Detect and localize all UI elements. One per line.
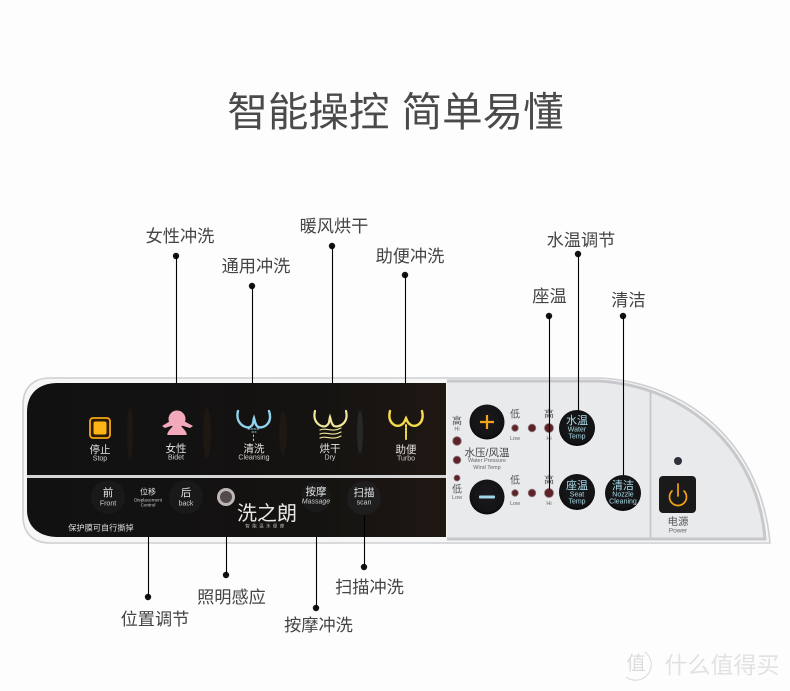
label: water temp low/high bbox=[510, 408, 554, 442]
label: massage: 按摩 bbox=[306, 485, 327, 498]
label: turbo bbox=[396, 443, 417, 462]
label: cleansing: 清洗 bbox=[244, 442, 265, 455]
label: seat temp low/high: Hi bbox=[546, 501, 552, 507]
callout: cleaning: 清洁 bbox=[611, 290, 646, 310]
label: cleansing bbox=[238, 442, 270, 462]
label: water pressure and wind temp: Wind Temp bbox=[473, 465, 501, 471]
label: power: Power bbox=[669, 528, 688, 534]
icon: cleansing bbox=[237, 411, 270, 441]
callout: position bbox=[121, 537, 189, 629]
callout: seat temp: 座温 bbox=[532, 286, 567, 306]
label: front bbox=[100, 486, 116, 508]
control panel bbox=[23, 378, 770, 543]
button: power bbox=[659, 476, 696, 513]
divider: power section bbox=[650, 392, 652, 538]
label: dry: Dry bbox=[325, 454, 336, 462]
panel: dark adjustment strip bbox=[27, 478, 446, 537]
label: pressure high: Hi bbox=[454, 426, 460, 432]
button: minus bbox=[470, 480, 504, 514]
label: displacement bbox=[134, 486, 163, 508]
label: seat temp low/high: Low bbox=[510, 501, 520, 507]
button: water temp: Temp bbox=[568, 434, 586, 440]
label: bidet bbox=[166, 442, 186, 462]
indicator lights: water temp bbox=[512, 424, 554, 432]
panel: light control area bbox=[447, 380, 765, 538]
label: massage bbox=[302, 485, 330, 506]
divider between dark sections bbox=[27, 475, 446, 478]
label: scan: scan bbox=[357, 500, 371, 506]
label: water pressure and wind temp bbox=[465, 447, 510, 471]
label: pressure high: 高 bbox=[452, 414, 462, 428]
label: film note: 保护膜可自行撕掉 bbox=[68, 522, 134, 532]
label: front: Front bbox=[100, 500, 116, 508]
button: water temp: 水温 bbox=[566, 414, 588, 427]
callout: scan bbox=[335, 515, 404, 597]
label: seat temp low/high: 低 bbox=[510, 474, 520, 486]
label: water temp low/high: 低 bbox=[510, 408, 520, 420]
label: power: 电源 bbox=[668, 515, 689, 528]
callout: seat temp bbox=[532, 286, 567, 489]
callout: position: 位置调节 bbox=[121, 609, 189, 629]
label: displacement: 位移 bbox=[140, 486, 156, 496]
panel: outer shell bbox=[23, 378, 770, 543]
label: dry: 烘干 bbox=[320, 443, 340, 455]
label: pressure low: 低 bbox=[452, 482, 462, 496]
indicator lights: pressure bbox=[453, 437, 461, 481]
callout: water temp: 水温调节 bbox=[547, 230, 615, 250]
indicator lights: seat temp bbox=[512, 488, 554, 498]
label: power bbox=[668, 515, 689, 534]
icon: turbo bbox=[389, 411, 423, 439]
label: pressure low: Low bbox=[452, 495, 462, 501]
brand logo: 智能温水便座 bbox=[245, 522, 287, 530]
callout: bidet bbox=[146, 226, 214, 383]
icon: dry bbox=[314, 411, 347, 438]
label: stop bbox=[90, 443, 110, 462]
label: seat temp low/high: 高 bbox=[544, 474, 554, 486]
button: seat temp: Seat bbox=[570, 492, 584, 498]
callout: cleaning bbox=[611, 290, 646, 475]
button: nozzle cleaning: Cleaning bbox=[609, 498, 637, 506]
label: water temp low/high: Hi bbox=[546, 436, 552, 442]
label: stop: Stop bbox=[93, 456, 107, 462]
label: cleansing: Cleansing bbox=[238, 454, 270, 462]
callout: warm air dry: 暖风烘干 bbox=[300, 216, 368, 236]
button: water temp: Water bbox=[568, 426, 587, 434]
watermark: 值 bbox=[626, 652, 646, 674]
callout: massage: 按摩冲洗 bbox=[284, 615, 353, 635]
icon: stop bbox=[90, 418, 110, 438]
callout: scan: 扫描冲洗 bbox=[335, 577, 404, 597]
button: seat temp: Temp bbox=[568, 498, 586, 506]
label: water pressure and wind temp: 水压/风温 bbox=[465, 447, 510, 459]
label: massage: Massage bbox=[302, 498, 330, 506]
label: pressure high bbox=[452, 414, 462, 432]
icon: light sensor bbox=[217, 488, 235, 506]
button: nozzle cleaning: Nozzle bbox=[612, 492, 634, 498]
label: displacement: Control bbox=[141, 502, 155, 508]
panel: dark function buttons bbox=[27, 383, 446, 475]
callout: warm air dry bbox=[300, 216, 368, 383]
button: seat temp: 座温 bbox=[566, 478, 588, 492]
callout: cleansing bbox=[222, 256, 290, 383]
label: water temp low/high: 高 bbox=[544, 408, 554, 420]
brand logo: 洗之朗 bbox=[237, 502, 297, 525]
callout: water temp bbox=[547, 230, 615, 411]
label: bidet: 女性 bbox=[166, 442, 186, 455]
callout: turbo: 助便冲洗 bbox=[376, 246, 444, 266]
callout: light sensor bbox=[197, 537, 266, 607]
label: displacement: Displacement bbox=[134, 498, 163, 502]
label: front: 前 bbox=[103, 486, 113, 499]
callout: cleansing: 通用冲洗 bbox=[222, 256, 290, 276]
label: seat temp low/high bbox=[510, 474, 554, 507]
label: scan: 扫描 bbox=[354, 486, 374, 499]
button: seat temp bbox=[559, 474, 595, 510]
label: scan bbox=[354, 486, 374, 506]
label: back bbox=[179, 487, 194, 508]
button: plus bbox=[470, 404, 504, 440]
label: dry bbox=[320, 443, 340, 462]
label: water temp low/high: Low bbox=[510, 436, 520, 442]
label: back: 后 bbox=[181, 487, 191, 499]
icon: bidet bbox=[162, 410, 193, 435]
watermark: 什么值得买 bbox=[664, 652, 780, 678]
button: nozzle cleaning: 清洁 bbox=[612, 479, 634, 492]
title: 智能操控 简单易懂 bbox=[227, 89, 564, 135]
label: turbo: Turbo bbox=[397, 456, 415, 462]
callout: massage bbox=[284, 537, 353, 635]
watermark bbox=[626, 652, 780, 680]
callout: light sensor: 照明感应 bbox=[197, 587, 266, 607]
label: back: back bbox=[179, 500, 194, 508]
label: bidet: Bidet bbox=[168, 454, 184, 462]
callout: turbo bbox=[376, 246, 444, 383]
label: pressure low bbox=[452, 482, 462, 501]
label: turbo: 助便 bbox=[396, 443, 417, 456]
button: nozzle cleaning bbox=[605, 475, 641, 511]
callout: bidet: 女性冲洗 bbox=[146, 226, 214, 246]
power indicator bbox=[674, 457, 682, 465]
label: water pressure and wind temp: Water Pressure bbox=[468, 458, 506, 464]
label: stop: 停止 bbox=[90, 443, 110, 456]
button: water temp bbox=[559, 410, 595, 446]
